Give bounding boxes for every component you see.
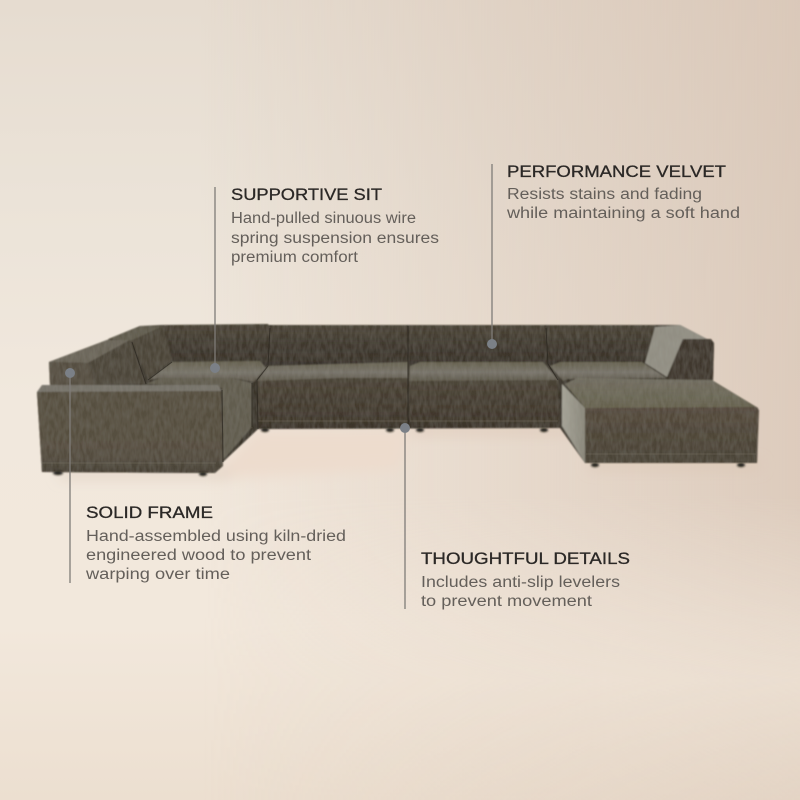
right arm inner — [645, 325, 707, 377]
middle left seat top — [257, 362, 408, 381]
right seat — [550, 362, 666, 381]
seams — [42, 421, 756, 463]
description — [421, 574, 620, 610]
description — [506, 186, 740, 222]
floor shadows — [60, 428, 760, 478]
right back — [548, 325, 655, 364]
right arm front — [668, 339, 714, 381]
corner seat — [148, 361, 266, 382]
sofa feet — [53, 428, 745, 476]
corner module back — [163, 324, 271, 366]
ottoman side — [562, 384, 585, 463]
callout: solid frame — [65, 368, 346, 583]
front seat top and side — [146, 378, 252, 460]
middle right back — [408, 325, 547, 364]
heading: THOUGHTFUL DETAILS — [421, 549, 630, 568]
left arm inner face — [88, 340, 146, 385]
description: Includes anti-slip levelers — [421, 574, 620, 591]
front arm block — [37, 391, 223, 473]
pointer line and dot — [210, 187, 220, 373]
heading: SUPPORTIVE SIT — [231, 185, 382, 204]
sofa illustration — [37, 324, 759, 476]
ottoman front — [585, 407, 759, 463]
description: while maintaining a soft hand — [506, 205, 740, 222]
description: Hand-assembled using kiln-dried — [86, 528, 346, 545]
callout: supportive sit — [210, 185, 439, 373]
middle right seat front — [409, 380, 560, 428]
middle left seat front — [257, 376, 408, 429]
description: spring suspension ensures — [231, 230, 439, 247]
description: premium comfort — [231, 249, 359, 266]
ottoman top — [565, 378, 758, 408]
description: engineered wood to prevent — [86, 547, 312, 564]
left arm end face — [49, 362, 95, 385]
heading: PERFORMANCE VELVET — [507, 162, 726, 181]
front arm top strip — [37, 385, 222, 392]
pointer line and dot — [487, 164, 497, 349]
left arm top — [49, 340, 130, 363]
description: to prevent movement — [421, 593, 593, 610]
middle left back — [268, 325, 408, 365]
description — [85, 528, 346, 583]
pointer line and dot — [65, 368, 75, 583]
description — [231, 210, 439, 266]
corner module side back top — [108, 326, 163, 341]
description: Hand-pulled sinuous wire — [231, 210, 416, 227]
callout: performance velvet — [487, 162, 740, 349]
pointer line and dot — [400, 423, 410, 609]
callout: thoughtful details — [400, 423, 630, 610]
middle right seat top — [409, 362, 558, 381]
corner module side back — [130, 326, 172, 379]
description: warping over time — [85, 566, 230, 583]
sofa silhouette underlay — [37, 325, 758, 473]
description: Resists stains and fading — [507, 186, 702, 203]
heading: SOLID FRAME — [86, 503, 213, 522]
